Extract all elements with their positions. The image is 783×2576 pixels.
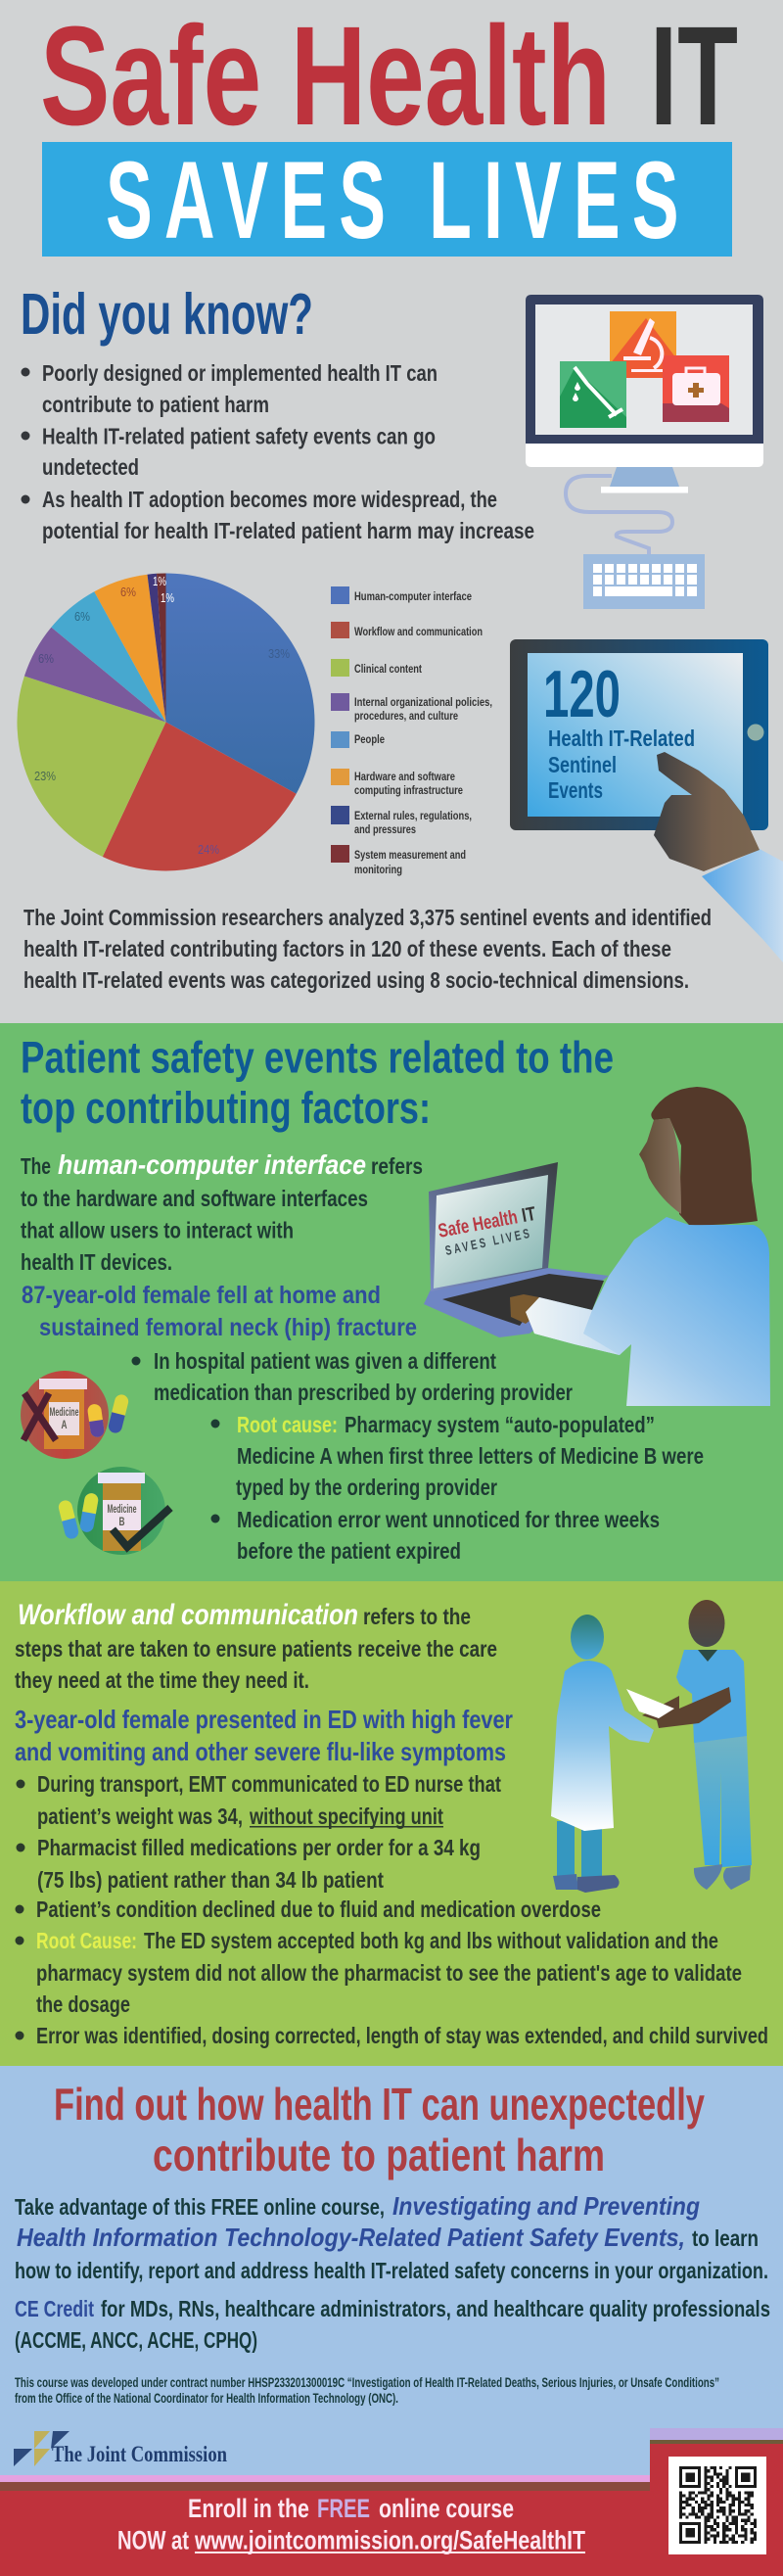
case details list: without specifying unit — [249, 1803, 443, 1829]
chart legend: Human-computer interface — [354, 589, 472, 603]
heading: patient safety events: top contributing factors: — [21, 1083, 431, 1133]
text block: human-computer interface definition: refers — [371, 1153, 423, 1179]
icon: medicine B with check — [57, 1467, 170, 1555]
QR code — [668, 2457, 766, 2554]
call to action bar: online course — [379, 2494, 514, 2523]
text block: workflow definition: steps that are taken to ensure patients receive the care — [15, 1636, 497, 1662]
case heading: 3-year-old female — [15, 1705, 513, 1766]
text block: human-computer interface definition: health IT devices. — [21, 1249, 172, 1275]
icon: medicine A with X: Medicine — [49, 1405, 79, 1419]
illustration: woman at laptop: IT — [520, 1203, 537, 1227]
case details list: (75 lbs) patient rather than 34 lb patient — [37, 1867, 384, 1893]
chart legend: monitoring — [354, 863, 402, 876]
case details list: typed by the ordering provider — [236, 1475, 497, 1500]
illustration: doctor and nurse — [551, 1600, 752, 1893]
case details list: patient’s weight was 34, — [37, 1803, 243, 1829]
bullet list: did you know — [22, 360, 534, 543]
text block: contract disclaimer — [15, 2375, 719, 2406]
case details list: Root Cause: — [36, 1928, 137, 1953]
icon: medicine B with check: Medicine — [108, 1502, 137, 1516]
bullet list: did you know: As health IT adoption becomes more widespread, the — [42, 487, 497, 512]
text block: research summary — [23, 905, 712, 993]
case details list — [16, 1771, 768, 2048]
chart legend: External rules, regulations, — [354, 809, 472, 822]
chart legend: computing infrastructure — [354, 783, 463, 797]
case heading: 87-year-old female — [22, 1282, 417, 1341]
call to action bar — [0, 2428, 783, 2576]
banner: saves lives: SAVES LIVES — [106, 139, 679, 261]
case heading: 3-year-old female: 3-year-old female presented in ED with high fever — [15, 1705, 513, 1734]
icon: tablet with 120 sentinel events: Sentinel — [548, 752, 617, 777]
icon: tablet with 120 sentinel events — [510, 639, 783, 962]
text block: CE credit — [15, 2296, 770, 2353]
pie chart: 6% — [120, 585, 136, 599]
pie chart: 33% — [268, 646, 290, 661]
pie chart: 23% — [34, 769, 56, 783]
case heading: 3-year-old female: and vomiting and other severe flu-like symptoms — [15, 1737, 506, 1766]
icon: tablet with 120 sentinel events: Events — [548, 777, 603, 803]
panel: find out more — [0, 2066, 783, 2576]
heading: patient safety events — [21, 1032, 614, 1133]
bullet list: did you know: undetected — [42, 454, 139, 480]
chart legend: procedures, and culture — [354, 709, 458, 723]
chart legend: System measurement and — [354, 848, 466, 862]
case details list: Patient’s condition declined due to fluid and medication overdose — [36, 1897, 601, 1922]
text block: CE credit: (ACCME, ANCC, ACHE, CPHQ) — [15, 2327, 257, 2353]
title: IT — [650, 0, 738, 155]
logo: The Joint Commission: The Joint Commission — [52, 2442, 227, 2466]
text block: course invitation: to learn — [692, 2225, 759, 2251]
heading: find out how — [54, 2079, 705, 2180]
case heading: 87-year-old female: sustained femoral neck (hip) fracture — [39, 1314, 417, 1341]
text block: workflow definition — [15, 1599, 497, 1693]
pie chart — [17, 574, 314, 870]
bullet list: did you know: Health IT-related patient safety events can go — [42, 423, 436, 448]
text block: human-computer interface definition: to the hardware and software interfaces — [21, 1186, 368, 1211]
chart legend — [331, 586, 492, 876]
icon: medicine A with X — [21, 1371, 130, 1459]
text block: workflow definition: Workflow and communication — [18, 1599, 358, 1631]
chart legend: Clinical content — [354, 662, 422, 676]
chart legend: Internal organizational policies, — [354, 695, 492, 709]
panel: human-computer interface — [0, 1023, 783, 1581]
call to action bar: Enroll in the — [188, 2494, 309, 2523]
text block: workflow definition: refers to the — [363, 1604, 471, 1629]
icon: medicine B with check: B — [119, 1515, 125, 1528]
case details list — [131, 1348, 704, 1564]
illustration: woman at laptop — [424, 1087, 770, 1406]
text block: human-computer interface definition — [21, 1149, 423, 1275]
icon: medicine A with X: A — [61, 1418, 68, 1431]
logo: The Joint Commission — [14, 2431, 227, 2466]
case details list: During transport, EMT communicated to ED nurse that — [37, 1771, 501, 1797]
case details list: Pharmacist filled medications per order for a 34 kg — [37, 1835, 481, 1860]
pie chart: 6% — [74, 609, 90, 624]
chart legend: Hardware and software — [354, 770, 455, 783]
icon: tablet with 120 sentinel events: 120 — [543, 657, 621, 731]
case details list: medication than prescribed by ordering provider — [154, 1380, 573, 1405]
text block: human-computer interface definition: The — [21, 1153, 51, 1179]
case details list: the dosage — [36, 1991, 130, 2017]
text block: human-computer interface definition: human-computer interface — [58, 1149, 366, 1180]
call to action bar: FREE — [317, 2494, 370, 2523]
case details list: Pharmacy system “auto-populated” — [345, 1412, 655, 1437]
icon: keyboard — [583, 554, 705, 609]
text block: course invitation — [15, 2191, 768, 2283]
illustration: woman at laptop: SAVES LIVES — [444, 1226, 530, 1258]
text block: human-computer interface definition: that allow users to interact with — [21, 1218, 294, 1243]
text block: workflow definition: they need at the time they need it. — [15, 1667, 309, 1693]
icon: tablet with 120 sentinel events: Health IT-Related — [548, 726, 695, 751]
icon: desktop computer — [526, 295, 763, 555]
call to action bar: www.jointcommission.org/SafeHealthIT — [194, 2526, 585, 2555]
case details list: In hospital patient was given a different — [154, 1348, 496, 1374]
text block: contract disclaimer: from the Office of the National Coordinator for Health Information Technology (ONC). — [15, 2391, 398, 2406]
bullet list: did you know: contribute to patient harm — [42, 392, 269, 417]
call to action bar: NOW at — [117, 2526, 189, 2555]
chart legend: People — [354, 732, 385, 746]
text block: course invitation: Investigating and Preventing — [392, 2191, 700, 2221]
text block: course invitation: Health Information Technology-Related Patient Safety Events, — [17, 2223, 685, 2252]
heading: did you know: Did you know? — [21, 282, 313, 347]
case heading: 87-year-old female: 87-year-old female fell at home and — [22, 1282, 381, 1309]
case details list: before the patient expired — [237, 1538, 461, 1564]
panel: workflow and communication — [0, 1581, 783, 2066]
pie chart: 6% — [38, 651, 54, 666]
heading: patient safety events: Patient safety events related to the — [21, 1032, 614, 1083]
bullet list: did you know: Poorly designed or implemented health IT can — [42, 360, 438, 386]
text block: course invitation: Take advantage of this FREE online course, — [15, 2194, 385, 2220]
pie chart: 1% — [153, 574, 166, 588]
case details list: Medication error went unnoticed for three weeks — [237, 1507, 660, 1532]
illustration: woman at laptop: Safe Health — [437, 1206, 520, 1242]
text block: CE credit: CE Credit — [15, 2296, 94, 2321]
chart legend: and pressures — [354, 822, 416, 836]
pie chart: 24% — [198, 842, 219, 857]
heading: find out how: contribute to patient harm — [153, 2130, 605, 2180]
chart legend: Workflow and communication — [354, 625, 483, 638]
bullet list: did you know: potential for health IT-related patient harm may increase — [42, 518, 534, 543]
case details list: Root cause: — [237, 1412, 338, 1437]
pie chart: 1% — [161, 590, 174, 605]
